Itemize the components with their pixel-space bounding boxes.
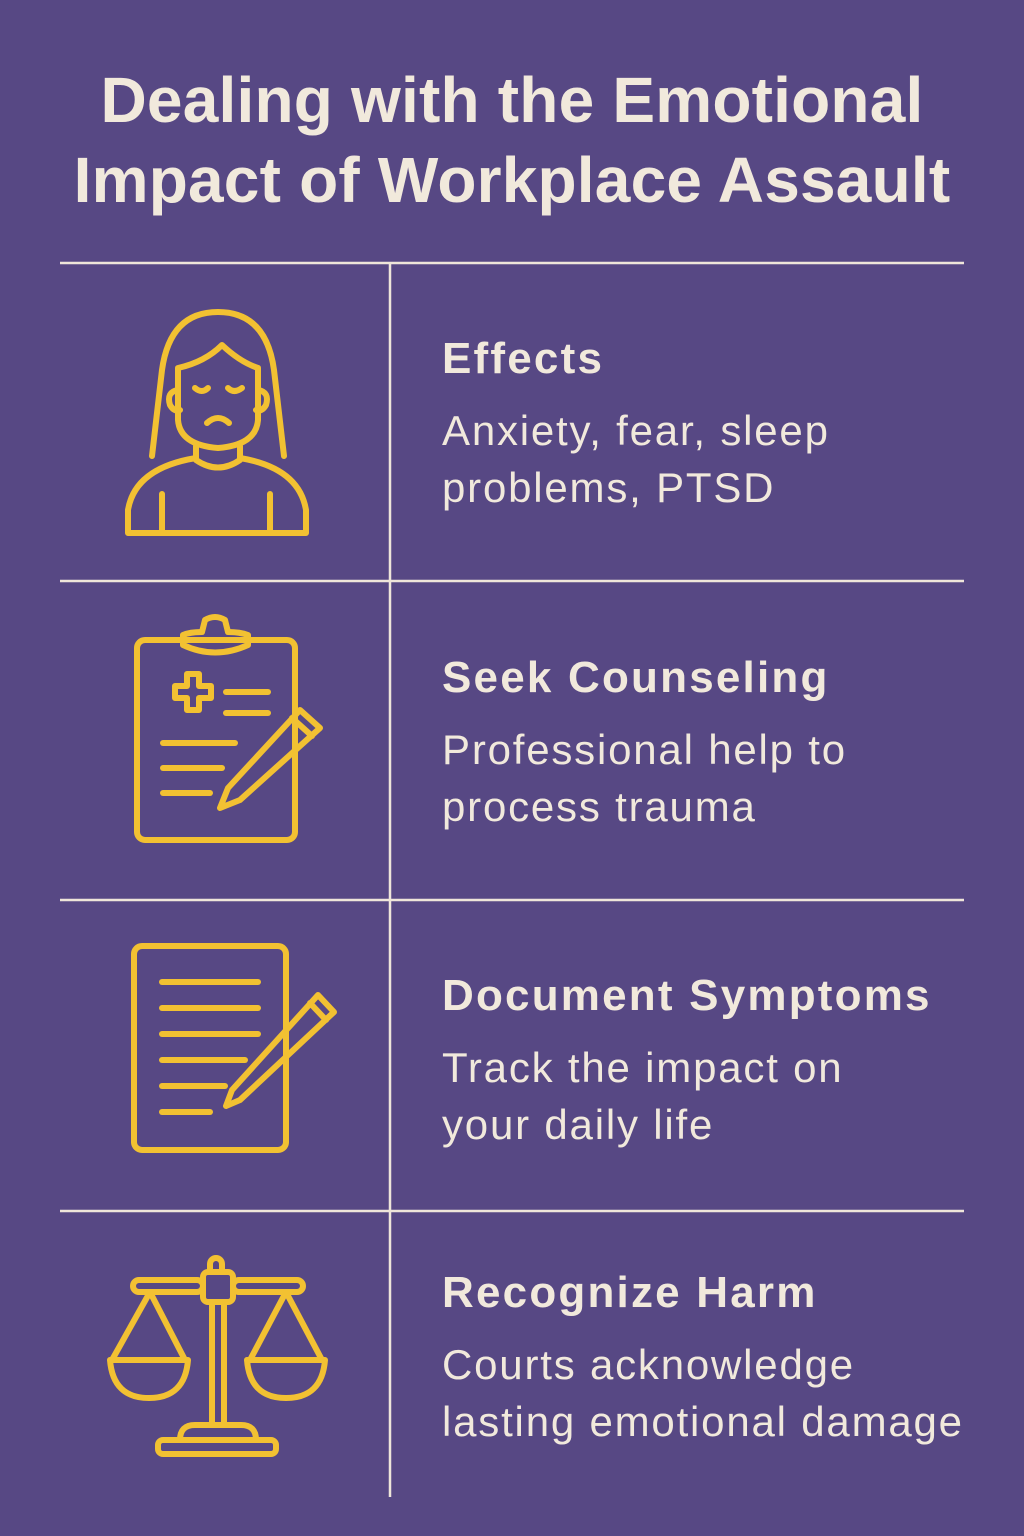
title: Dealing with the Emotional — [100, 64, 924, 136]
text: effects: problems, PTSD — [442, 464, 775, 511]
text: document symptoms: Track the impact on — [442, 1044, 843, 1091]
title — [74, 64, 950, 216]
text: recognize harm: lasting emotional damage — [442, 1398, 964, 1445]
title: Impact of Workplace Assault — [74, 144, 950, 216]
text: seek counseling — [442, 653, 847, 830]
text: recognize harm: Courts acknowledge — [442, 1341, 855, 1388]
text: document symptoms — [442, 971, 932, 1148]
text: seek counseling: Seek Counseling — [442, 653, 830, 702]
icon: document — [134, 946, 334, 1150]
text: document symptoms: Document Symptoms — [442, 971, 932, 1020]
text: document symptoms: your daily life — [442, 1101, 714, 1148]
icon: sad person — [128, 312, 306, 533]
text: recognize harm — [442, 1268, 964, 1445]
text: effects — [442, 334, 830, 511]
text: effects: Effects — [442, 334, 604, 383]
text: recognize harm: Recognize Harm — [442, 1268, 818, 1317]
text: seek counseling: Professional help to — [442, 726, 847, 773]
text: seek counseling: process trauma — [442, 783, 757, 830]
icon: scales — [110, 1258, 325, 1454]
text: effects: Anxiety, fear, sleep — [442, 407, 830, 454]
icon: clipboard — [137, 617, 320, 840]
